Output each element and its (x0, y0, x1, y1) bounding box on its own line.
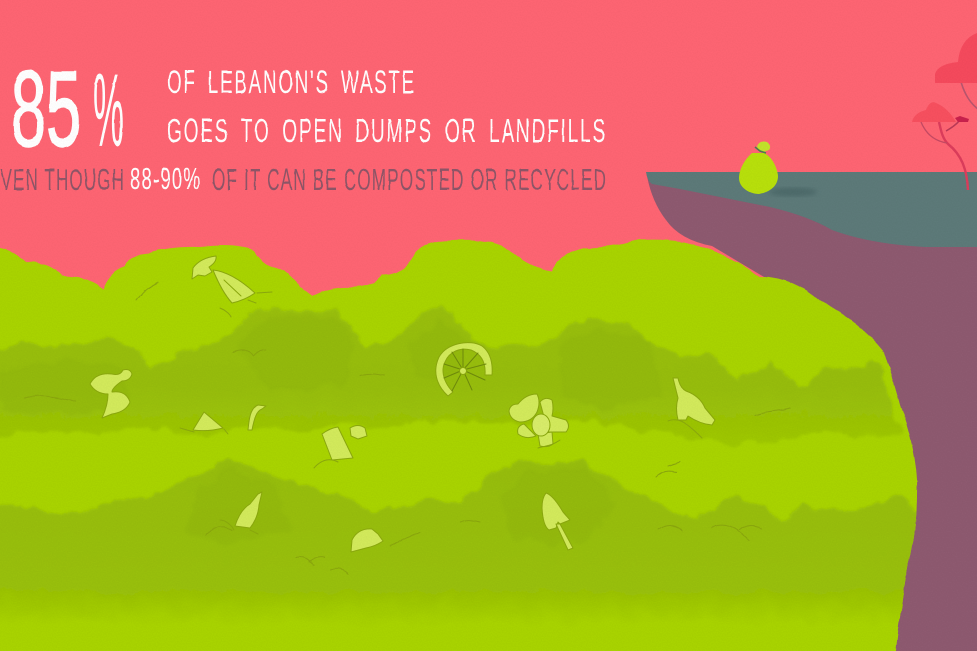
item: bicycle wheel (436, 343, 492, 396)
bear leg (518, 424, 553, 447)
cliff (646, 172, 977, 651)
line: goes to open dumps or landfills: GOES TO OPEN DUMPS OR LANDFILLS (167, 112, 607, 149)
line: even though... (0, 161, 607, 197)
item: half-buried blob (351, 529, 383, 552)
big number 85: 85 (11, 48, 81, 169)
item: plastic doll (90, 370, 132, 418)
darker mottling in the shaded bands (0, 315, 660, 545)
item: crumpled bag (668, 378, 715, 438)
bear belly (532, 414, 550, 436)
item: paper cone (180, 412, 228, 434)
bear arm (540, 398, 568, 432)
item: paper cup (314, 426, 367, 468)
shaded band: lower (0, 460, 925, 630)
line: even though...: 88-90% (130, 161, 201, 196)
bear head (509, 394, 539, 422)
mound base (0, 230, 925, 651)
waste items (90, 256, 715, 552)
shaded band: upper (0, 306, 900, 445)
icon: garbage bag on the cliff edge (739, 142, 778, 194)
item: teddy bear (509, 394, 568, 448)
ground shadow (769, 188, 817, 196)
item: shovel (542, 493, 573, 550)
item: spray bottle (192, 256, 272, 317)
headline text: % (93, 53, 124, 169)
item: glass bottle (220, 492, 262, 534)
cliff top surface (646, 172, 977, 247)
tree: large, cropped at right edge (935, 32, 977, 110)
green waste mound (0, 230, 925, 651)
cliff rock face (647, 176, 977, 651)
small ground marks (25, 282, 790, 574)
item: cane handle (248, 405, 266, 430)
headline text (0, 48, 607, 197)
tree: small (912, 102, 969, 190)
line: even though...: OF IT CAN BE COMPOSTED OR RECYCLED (212, 162, 607, 197)
line: of Lebanon's waste: OF LEBANON'S WASTE (167, 64, 416, 100)
